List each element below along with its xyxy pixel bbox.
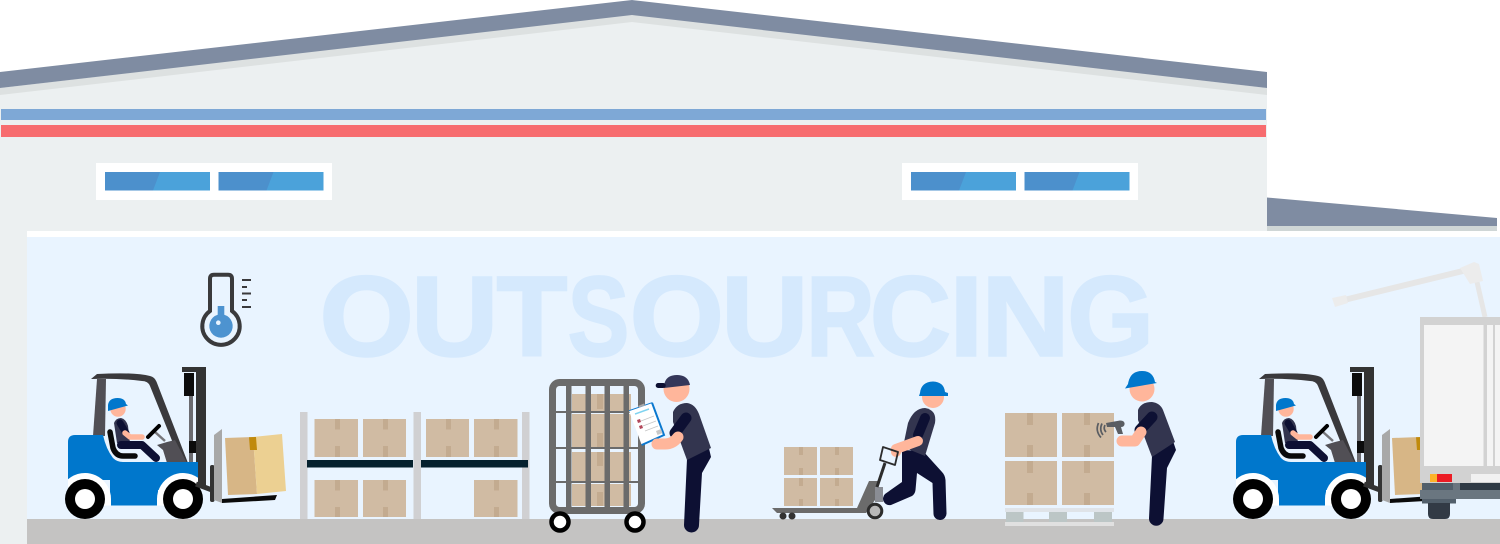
red stripe — [1, 125, 1266, 137]
dock arm — [1332, 262, 1485, 317]
watermark heading: R — [806, 254, 875, 380]
left window — [96, 163, 332, 200]
icon: thermometer — [202, 275, 251, 345]
worker pushing pallet jack — [877, 382, 948, 520]
forklift left — [65, 367, 286, 519]
truck rear — [1420, 317, 1500, 519]
worker with barcode scanner — [1097, 371, 1176, 526]
shelving with boxes — [300, 412, 530, 519]
watermark heading: I — [950, 254, 983, 380]
watermark heading: U — [721, 254, 808, 380]
pallet jack with boxes — [772, 447, 883, 520]
watermark heading: S — [568, 254, 629, 380]
roof underside band — [0, 14, 1267, 95]
interior back wall — [27, 237, 1500, 519]
worker with clipboard — [629, 375, 711, 532]
watermark heading: C — [870, 254, 951, 380]
pallet with boxes — [1005, 413, 1114, 526]
blue stripe — [1, 109, 1266, 120]
annex roof — [1267, 198, 1497, 231]
right window — [902, 163, 1138, 200]
forklift right — [1233, 367, 1453, 519]
watermark heading: O — [630, 254, 724, 380]
floor — [27, 519, 1500, 544]
watermark heading: G — [1067, 254, 1154, 380]
main roof — [0, 0, 1267, 88]
roll cage with boxes — [550, 380, 644, 530]
interior white lintel — [27, 231, 1500, 237]
watermark heading: U — [411, 254, 498, 380]
watermark heading: O — [320, 254, 414, 380]
watermark heading: N — [982, 254, 1070, 380]
watermark heading: T — [497, 254, 567, 380]
